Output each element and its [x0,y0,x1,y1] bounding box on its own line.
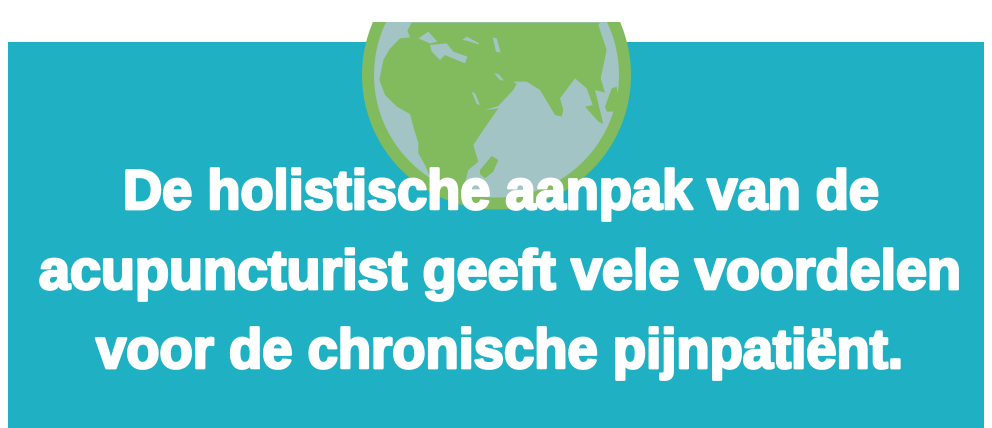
heading: acupuncturist geeft vele voordelen [39,238,961,301]
heading: De holistische aanpak van de [123,158,879,221]
heading: voor de chronische pijnpatiënt. [96,317,903,380]
icon: globe [362,22,631,210]
heading [39,158,961,380]
